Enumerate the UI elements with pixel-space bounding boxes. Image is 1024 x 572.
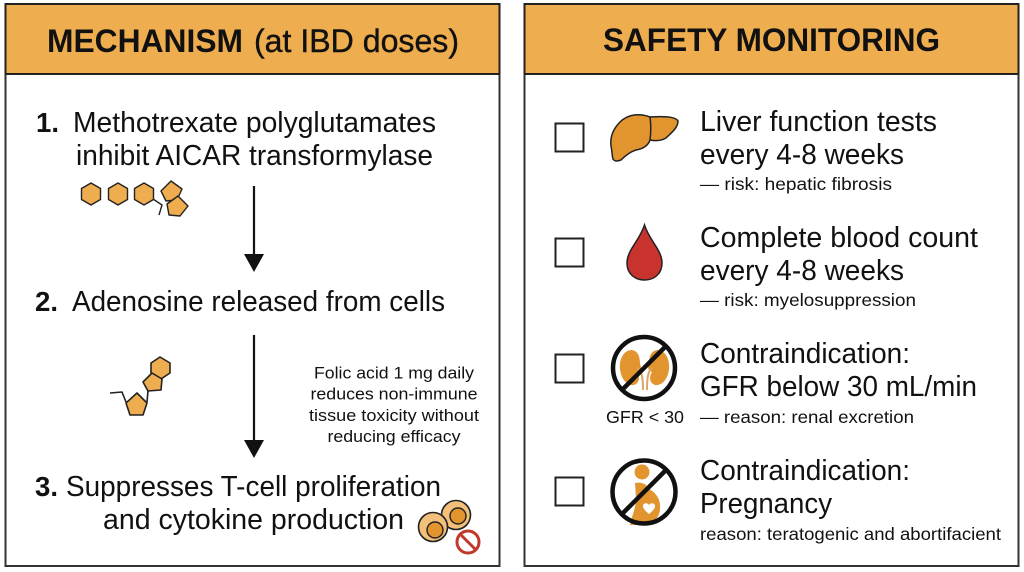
GFR text: Contraindication: [700, 337, 910, 369]
panel: safety monitoring [524, 4, 1018, 566]
liver text [700, 105, 937, 194]
step 3 text: and cytokine production [103, 503, 404, 535]
label: GFR < 30: GFR < 30 [606, 407, 684, 427]
GFR text [700, 337, 977, 427]
step 3 text [35, 470, 441, 535]
liver text: every 4-8 weeks [700, 138, 904, 170]
step 1 text: inhibit AICAR transformylase [76, 139, 433, 171]
icon: polyglutamate chain [82, 181, 188, 216]
checkbox: liver [556, 124, 584, 152]
heading: mechanism: (at IBD doses) [254, 23, 459, 59]
note: folic acid: reduces non-immune [310, 384, 478, 404]
step 3 text: Suppresses T-cell proliferation [66, 470, 441, 502]
checkbox: GFR [556, 354, 584, 382]
heading: mechanism [6, 4, 500, 74]
liver text: — risk: hepatic fibrosis [700, 174, 892, 194]
note: folic acid: tissue toxicity without [309, 406, 479, 425]
step 1 text: Methotrexate polyglutamates [73, 106, 436, 138]
icon: no pregnancy [612, 460, 676, 525]
icon: liver [611, 115, 678, 161]
blood text: — risk: myelosuppression [700, 290, 916, 310]
note: folic acid: Folic acid 1 mg daily [314, 364, 475, 382]
panel: mechanism [6, 4, 500, 566]
blood text [700, 221, 978, 310]
GFR text: — reason: renal excretion [700, 407, 914, 427]
checkbox: pregnancy [556, 478, 584, 506]
arrow: step 2 to 3 [244, 335, 264, 458]
step 1 text: 1. [36, 107, 59, 138]
icon: T-cells with prohibition sign [418, 500, 479, 553]
pregnancy text [700, 454, 1001, 544]
step 2 text: 2. [35, 286, 58, 317]
GFR text: GFR below 30 mL/min [700, 370, 977, 402]
step 1 text [36, 106, 436, 171]
heading: safety monitoring [524, 4, 1018, 74]
icon: blood drop [627, 225, 662, 280]
heading: safety monitoring: SAFETY MONITORING [603, 22, 940, 58]
heading: mechanism: MECHANISM [47, 23, 243, 59]
liver text: Liver function tests [700, 105, 937, 137]
blood text: every 4-8 weeks [700, 254, 904, 286]
pregnancy text: Pregnancy [700, 487, 833, 519]
step 2 text: Adenosine released from cells [72, 285, 445, 317]
note: folic acid: reducing efficacy [328, 427, 461, 446]
note: folic acid [309, 364, 479, 446]
arrow: step 1 to 2 [244, 186, 264, 272]
blood text: Complete blood count [700, 221, 978, 253]
step 3 text: 3. [35, 471, 58, 502]
icon: no kidneys [613, 337, 675, 399]
pregnancy text: reason: teratogenic and abortifacient [700, 524, 1001, 544]
checkbox: blood [556, 238, 584, 266]
pregnancy text: Contraindication: [700, 454, 910, 486]
icon: adenosine molecule [110, 357, 170, 415]
